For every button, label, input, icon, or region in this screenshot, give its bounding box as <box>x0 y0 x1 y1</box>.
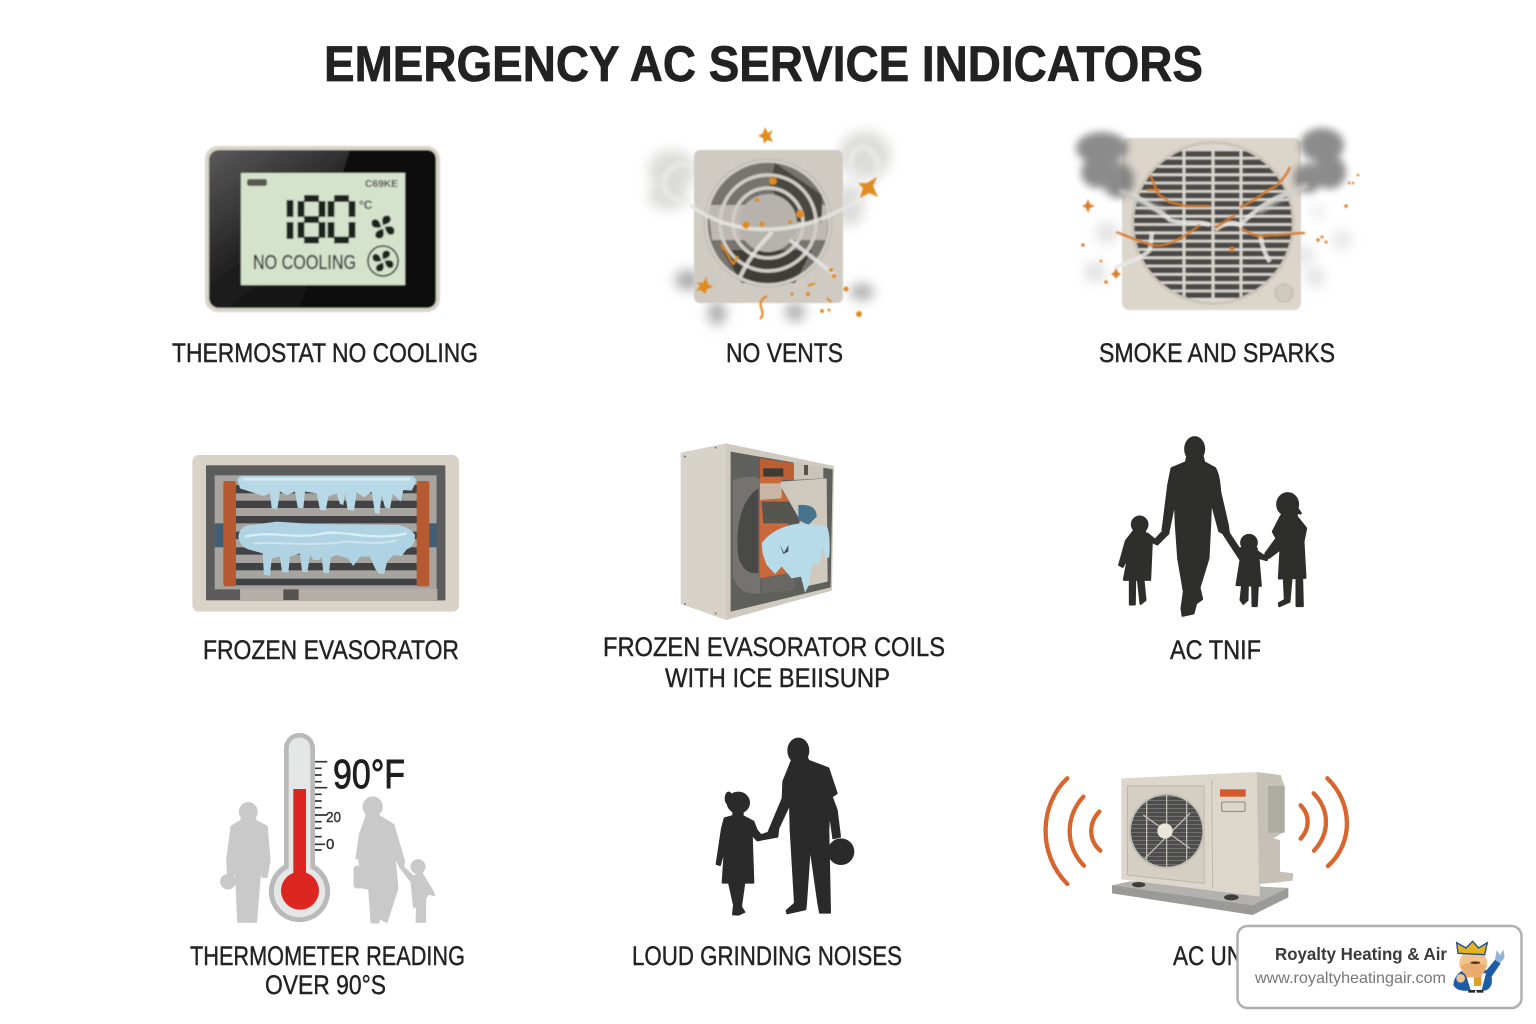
icon: king mascot <box>1453 941 1505 993</box>
label: thermometer reading over 90's: OVER 90°S <box>265 970 386 1000</box>
panel: ac unit <box>1046 772 1347 971</box>
icon: open AC cabinet with ice <box>681 443 834 620</box>
badge panel <box>1238 926 1522 1008</box>
panel: frozen evaporator coils <box>603 443 945 693</box>
label: frozen evaporator: FROZEN EVASORATOR <box>203 635 459 665</box>
title: EMERGENCY AC SERVICE INDICATORS <box>324 36 1203 92</box>
icon: thermostat: °C <box>359 198 373 212</box>
icon: thermometer with silhouettes: 90°F <box>333 751 405 797</box>
panel: thermometer reading <box>190 733 465 1000</box>
panel: ac tnif <box>1119 437 1306 665</box>
icon: damaged vent with smoke <box>648 127 891 325</box>
label: thermometer reading over 90's <box>190 941 465 1000</box>
icon: thermometer with silhouettes: 20 <box>326 809 341 826</box>
website: www.royaltyheatingair.com <box>1254 970 1446 987</box>
icon: sparking grille with smoke <box>1076 128 1359 310</box>
label: frozen evaporator coils: WITH ICE BEIISUNP <box>665 663 890 693</box>
label: ac tnif: AC TNIF <box>1170 635 1261 665</box>
label: frozen evaporator coils <box>603 632 945 693</box>
panel: loud grinding noises <box>632 739 902 971</box>
label: frozen evaporator coils: FROZEN EVASORATOR COILS <box>603 632 945 662</box>
label: thermostat no cooling: THERMOSTAT NO COOLING <box>172 338 478 368</box>
label: ac unit: AC UNIT <box>1173 941 1263 971</box>
icon: thermostat: NO COOLING <box>253 252 356 274</box>
label: smoke and sparks: SMOKE AND SPARKS <box>1099 338 1335 368</box>
panel: smoke and sparks <box>1076 128 1359 368</box>
icon: thermometer with silhouettes <box>221 733 434 922</box>
label: thermometer reading over 90's: THERMOMETER READING <box>190 941 465 971</box>
panel: thermostat no cooling <box>172 146 478 368</box>
label: no vents: NO VENTS <box>726 338 843 368</box>
icon: thermometer with silhouettes: 0 <box>326 836 334 853</box>
panel: frozen evaporator <box>192 455 459 665</box>
badge: royalty heating and air <box>1238 926 1522 1008</box>
icon: thermostat <box>205 146 440 312</box>
icon: thermostat: C69KE <box>365 179 398 190</box>
icon: iced evaporator coil <box>192 455 459 612</box>
icon: parent and child silhouette <box>717 739 853 915</box>
label: loud grinding noises: LOUD GRINDING NOISES <box>632 941 902 971</box>
icon: family silhouette <box>1119 437 1306 616</box>
panel: no vents <box>648 127 891 368</box>
company name: Royalty Heating & Air <box>1275 944 1447 964</box>
icon: outdoor AC unit with sound waves <box>1046 772 1347 915</box>
